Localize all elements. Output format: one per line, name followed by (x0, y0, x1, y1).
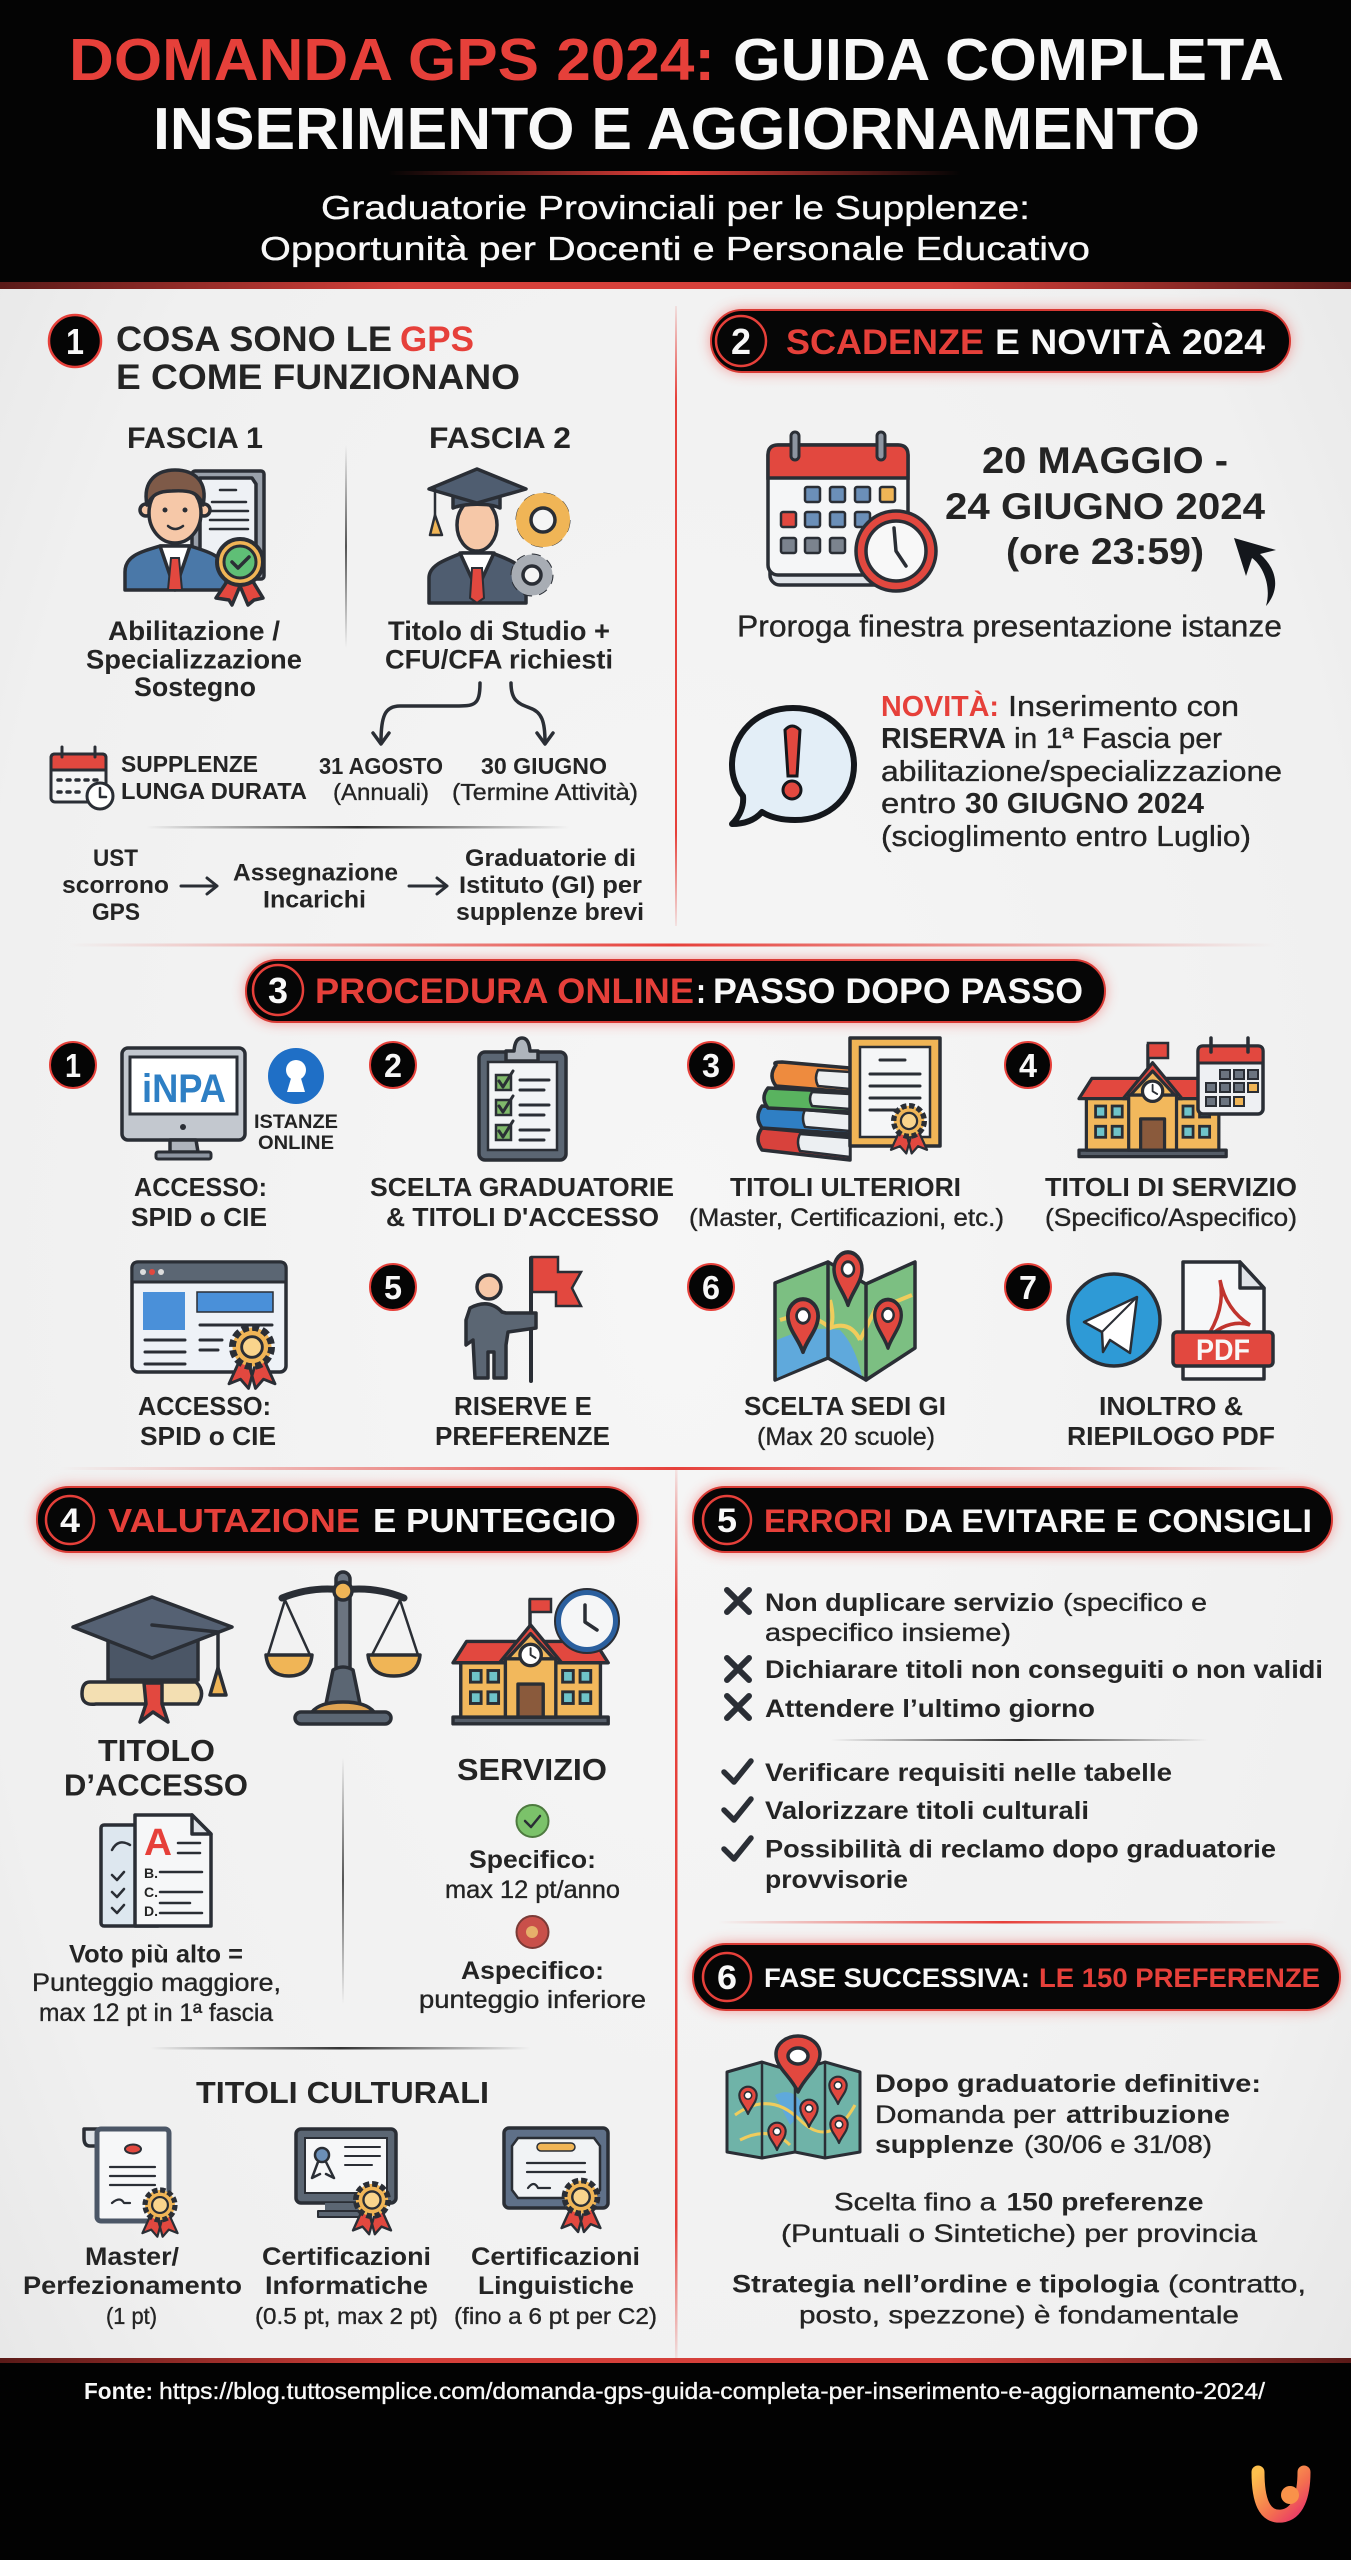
icon: exam papers: D. (144, 1903, 158, 1919)
item: certificazioni linguistiche (454, 2128, 657, 2329)
subtitle: Graduatorie Provinciali per le Supplenze: (321, 189, 1030, 226)
list: errors (727, 1589, 1323, 1723)
text: 150 preferenze (781, 2188, 1257, 2248)
text: strategia: posto, spezzone) è fondamentale (799, 2302, 1239, 2330)
specifico (445, 1805, 620, 1904)
aspecifico: Aspecifico: (461, 1957, 604, 1985)
icon: keyhole badge (268, 1048, 324, 1104)
section 1 heading: 1 (66, 321, 84, 362)
text: fascia 1 description: Abilitazione / (108, 616, 281, 646)
text: voto più alto: Punteggio maggiore, (32, 1969, 281, 1997)
icon: map with preference pins (727, 2036, 860, 2158)
icon: books and certificate (758, 1038, 940, 1160)
icon: exam papers: C. (144, 1884, 158, 1900)
text: voto più alto: Voto più alto = (69, 1940, 243, 1968)
step 5: RISERVE E (454, 1391, 592, 1421)
icon: exam papers: A (144, 1822, 172, 1864)
text: supplenze lunga durata: LUNGA DURATA (121, 778, 307, 804)
step 2: & TITOLI D'ACCESSO (386, 1202, 659, 1232)
text: novità: entro (881, 788, 956, 820)
text: strategia: (contratto, (1168, 2270, 1306, 2298)
text: fascia 1 description (86, 616, 302, 702)
title: GUIDA COMPLETA (733, 27, 1284, 93)
step 6: 6 (702, 1269, 720, 1306)
text: novità: RISERVA (881, 723, 1006, 755)
step 1: SPID o CIE (131, 1202, 267, 1232)
step 7: INOLTRO & (1099, 1391, 1243, 1421)
section 5 heading pill: ERRORI (764, 1503, 892, 1539)
label: istanze online: ISTANZE (254, 1112, 338, 1133)
step 4: 4 (1019, 1047, 1038, 1084)
title (69, 27, 1284, 162)
text: dopo graduatorie: supplenze (875, 2131, 1014, 2159)
flow: graduatorie di istituto: Istituto (GI) per (459, 872, 642, 899)
icon: balance scale (266, 1572, 420, 1724)
step 3: TITOLI ULTERIORI (730, 1172, 961, 1202)
panel: cosa sono le GPS (49, 315, 644, 926)
text: 30 giugno: (Termine Attività) (452, 779, 638, 805)
icon: teacher with certificate (125, 470, 264, 605)
section 2 heading pill (711, 310, 1290, 372)
icon: clipboard (479, 1038, 566, 1160)
text: fascia 2 description (385, 616, 613, 674)
text: novità (881, 689, 1282, 853)
item: certificazioni informatiche: Certificazioni (262, 2243, 431, 2271)
step 3 (688, 1038, 1004, 1232)
icon: framed certificate (504, 2128, 608, 2232)
footer (0, 2358, 1351, 2560)
section 3 heading pill: PROCEDURA ONLINE (315, 972, 694, 1011)
text: 150 preferenze: Scelta fino a (834, 2188, 996, 2216)
icon: graduate with gears (429, 469, 565, 603)
section 2 heading pill: SCADENZE (786, 323, 984, 362)
step 1: 1 (65, 1047, 81, 1084)
date (945, 440, 1265, 572)
text: 150 preferenze: (Puntuali o Sintetiche) per provincia (781, 2220, 1257, 2248)
header banner (0, 0, 1351, 289)
section 4 heading pill: VALUTAZIONE (108, 1502, 360, 1539)
text: 30 giugno: 30 GIUGNO (481, 753, 607, 779)
section 4 heading pill: 4 (60, 1502, 80, 1540)
item: certificazioni informatiche (255, 2129, 438, 2329)
arrow (409, 878, 447, 894)
text: novità: 30 GIUGNO 2024 (965, 788, 1204, 820)
icon: person with flag (466, 1257, 581, 1381)
list: errors: Attendere l’ultimo giorno (765, 1695, 1095, 1723)
titoli culturali heading: TITOLI CULTURALI (196, 2075, 489, 2110)
flow: graduatorie di istituto: supplenze brevi (456, 899, 644, 926)
icon: monitor certificate (296, 2129, 396, 2234)
icon: speech bubble alert (732, 708, 854, 824)
panel: procedura online (50, 960, 1297, 1451)
subtitle: Opportunità per Docenti e Personale Educativo (260, 230, 1090, 267)
section 6 heading pill: 6 (717, 1959, 737, 1997)
list: errors: aspecifico insieme) (765, 1619, 1011, 1647)
section 3 heading pill: PASSO DOPO PASSO (713, 972, 1083, 1011)
text: proroga: Proroga finestra presentazione istanze (737, 608, 1282, 644)
flow: UST: scorrono (62, 872, 169, 899)
item: certificazioni linguistiche: Certificazioni (471, 2243, 640, 2271)
section 5 heading pill (693, 1487, 1332, 1552)
label: istanze online: ONLINE (258, 1133, 334, 1154)
icon: exam papers: B. (144, 1865, 158, 1881)
list: tips: Valorizzare titoli culturali (765, 1797, 1089, 1825)
icon: map with pins (775, 1252, 915, 1380)
specifico: Specifico: (469, 1846, 596, 1874)
panel: errori da evitare (693, 1487, 1332, 1924)
text: fascia 1 description: Sostegno (134, 672, 256, 702)
list: tips: Verificare requisiti nelle tabelle (765, 1759, 1172, 1787)
section 3 heading pill (246, 960, 1105, 1022)
text: fascia 2 description: Titolo di Studio + (388, 616, 610, 646)
icon: school with clock (453, 1589, 619, 1724)
icon: small calendar (51, 747, 113, 809)
icon: diploma (84, 2129, 178, 2237)
list: errors: Non duplicare servizio (765, 1589, 1054, 1617)
text: supplenze lunga durata (121, 751, 307, 804)
icon: monitor inpa (122, 1048, 245, 1159)
list: tips (724, 1759, 1276, 1894)
text: fascia 1 description: Specializzazione (86, 644, 302, 674)
step 3: 3 (702, 1047, 720, 1084)
section 4 heading pill: E PUNTEGGIO (373, 1502, 616, 1539)
titolo d'accesso heading: TITOLO (98, 1733, 215, 1768)
step: accesso browser: SPID o CIE (140, 1421, 276, 1451)
step 7: 7 (1019, 1269, 1037, 1306)
item: certificazioni informatiche: (0.5 pt, max 2 pt) (255, 2303, 438, 2329)
titolo d'accesso heading (64, 1733, 248, 1802)
panel: fase successiva (693, 1944, 1340, 2330)
text: 31 agosto: 31 AGOSTO (319, 753, 443, 779)
flow: UST: UST (93, 845, 138, 872)
icon: school and calendar (1079, 1038, 1263, 1157)
step 6 (688, 1252, 946, 1451)
text: dopo graduatorie: Domanda per (875, 2101, 1056, 2129)
flow: assegnazione: Assegnazione (233, 860, 398, 886)
step 7: RIEPILOGO PDF (1067, 1421, 1275, 1451)
subtitle (260, 189, 1090, 267)
item: master: Master/ (85, 2243, 179, 2271)
item: master: (1 pt) (106, 2303, 157, 2329)
text: novità: abilitazione/specializzazione (881, 756, 1282, 788)
text: novità: NOVITÀ: (881, 689, 999, 723)
section 1 heading: COSA SONO LE (116, 320, 392, 359)
text: 31 agosto (319, 753, 443, 805)
text: dopo graduatorie: (30/06 e 31/08) (1024, 2131, 1212, 2159)
specifico: max 12 pt/anno (445, 1876, 620, 1904)
text: dopo graduatorie (875, 2070, 1261, 2159)
step 5: PREFERENZE (435, 1421, 610, 1451)
section 2 heading pill: 2 (731, 321, 751, 362)
step 4: (Specifico/Aspecifico) (1045, 1204, 1297, 1232)
titolo d'accesso heading: D’ACCESSO (64, 1768, 248, 1802)
step 6: (Max 20 scuole) (757, 1423, 935, 1451)
text: fascia 2 description: CFU/CFA richiesti (385, 644, 613, 674)
step 1: ACCESSO: (134, 1172, 267, 1202)
section 5 heading pill: 5 (717, 1502, 737, 1540)
section 3 heading pill: 3 (268, 970, 288, 1011)
flow: assegnazione (233, 860, 398, 914)
text: novità: (scioglimento entro Luglio) (881, 821, 1251, 853)
text: strategia (732, 2270, 1306, 2330)
text: 31 agosto: (Annuali) (333, 779, 429, 805)
flow: UST (62, 845, 169, 926)
flow: UST: GPS (92, 899, 140, 926)
date: 24 GIUGNO 2024 (945, 486, 1265, 527)
date: (ore 23:59) (1006, 531, 1204, 572)
icon: browser certificate (132, 1262, 286, 1388)
source line: https://blog.tuttosemplice.com/domanda-gps-guida-completa-per-inserimento-e-aggiornamento-2024/ (159, 2378, 1266, 2404)
title: DOMANDA GPS 2024: (69, 27, 715, 93)
section 6 heading pill (693, 1944, 1340, 2010)
aspecifico: punteggio inferiore (419, 1986, 646, 2014)
list: tips: Possibilità di reclamo dopo graduatorie (765, 1836, 1276, 1864)
icon: exam papers (101, 1815, 211, 1926)
section 4 heading pill (37, 1487, 638, 1552)
step 6: SCELTA SEDI GI (744, 1391, 946, 1421)
step 5 (370, 1257, 610, 1451)
title: INSERIMENTO E AGGIORNAMENTO (153, 96, 1200, 162)
text: dopo graduatorie: attribuzione (1066, 2101, 1230, 2129)
item: certificazioni informatiche: Informatiche (265, 2272, 428, 2300)
panel: scadenze e novità (711, 310, 1290, 853)
icon: graduation cap and scroll (73, 1597, 232, 1722)
aspecifico (419, 1916, 646, 2014)
section 1 heading: GPS (400, 320, 474, 359)
step 3: (Master, Certificazioni, etc.) (689, 1204, 1004, 1232)
text: 150 preferenze: 150 preferenze (1006, 2188, 1204, 2216)
label: istanze online (254, 1112, 338, 1154)
icon: pdf file (1173, 1262, 1273, 1379)
section 6 heading pill: FASE SUCCESSIVA: (764, 1963, 1030, 1993)
section 6 heading pill: LE 150 PREFERENZE (1039, 1963, 1320, 1993)
step 5: 5 (384, 1269, 402, 1306)
text: voto più alto: max 12 pt in 1ª fascia (39, 1999, 273, 2027)
step 4 (1005, 1038, 1297, 1232)
step 2: SCELTA GRADUATORIE (370, 1172, 674, 1202)
step 2 (370, 1038, 674, 1232)
flow: assegnazione: Incarichi (263, 886, 366, 914)
section 2 heading pill: E NOVITÀ 2024 (995, 322, 1266, 362)
section 1 heading (49, 315, 520, 397)
text: supplenze lunga durata: SUPPLENZE (121, 751, 258, 777)
arrow (181, 878, 217, 894)
fascia 2 heading: FASCIA 2 (429, 422, 571, 455)
arrow: black curved (1234, 538, 1276, 606)
text: dopo graduatorie: Dopo graduatorie definitive: (875, 2070, 1261, 2098)
section 3 heading pill: : (696, 972, 706, 1011)
text: strategia: Strategia nell’ordine e tipologia (732, 2270, 1160, 2298)
item: master: Perfezionamento (23, 2272, 242, 2300)
icon: calendar with clock (768, 432, 936, 591)
section 1 heading: E COME FUNZIONANO (116, 358, 520, 397)
step 2: 2 (384, 1047, 402, 1084)
text: voto più alto (32, 1940, 281, 2027)
list: errors: Dichiarare titoli non conseguiti o non validi (765, 1656, 1323, 1684)
icon: logo (1258, 2472, 1304, 2516)
list: errors: (specifico e (1063, 1589, 1207, 1617)
item: certificazioni linguistiche: (fino a 6 pt per C2) (454, 2303, 657, 2329)
item: certificazioni linguistiche: Linguistiche (478, 2272, 634, 2300)
section 5 heading pill: DA EVITARE E CONSIGLI (904, 1503, 1312, 1539)
source line: Fonte: (84, 2378, 153, 2404)
step 4: TITOLI DI SERVIZIO (1045, 1172, 1297, 1202)
item: master (23, 2129, 242, 2329)
fascia 1 heading: FASCIA 1 (127, 422, 263, 455)
arrows: to deadlines (373, 683, 553, 744)
flow: graduatorie di istituto: Graduatorie di (465, 845, 636, 872)
flow: graduatorie di istituto (456, 845, 644, 926)
servizio heading: SERVIZIO (457, 1752, 607, 1787)
date: 20 MAGGIO - (982, 440, 1228, 481)
list: tips: provvisorie (765, 1866, 908, 1894)
icon: telegram (1068, 1274, 1160, 1366)
step 1 (50, 1042, 338, 1232)
text: novità: Inserimento con (1008, 691, 1239, 723)
icon: pdf file: PDF (1196, 1334, 1250, 1367)
step: accesso browser: ACCESSO: (138, 1391, 271, 1421)
step: accesso browser (132, 1262, 286, 1451)
panel: valutazione e punteggio (23, 1487, 657, 2329)
step 7 (1005, 1262, 1275, 1451)
text: novità: in 1ª Fascia per (1014, 723, 1222, 755)
text: 30 giugno (452, 753, 638, 805)
icon: monitor inpa: iNPA (142, 1067, 226, 1111)
